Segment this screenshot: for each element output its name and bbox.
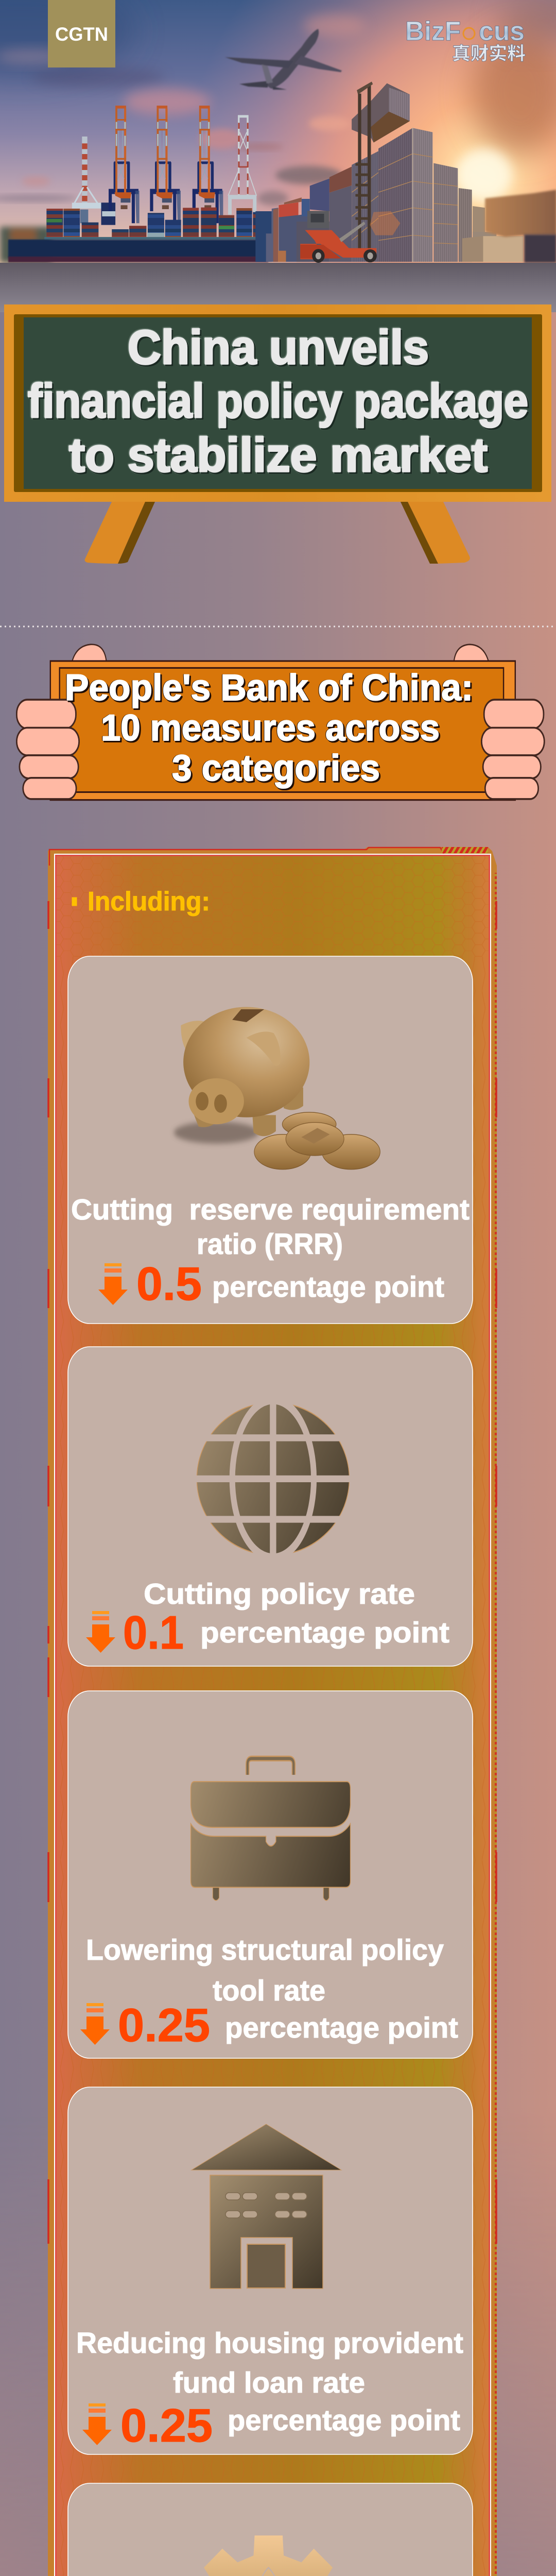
CGTN logo bbox=[48, 0, 115, 67]
card 1 text: Cutting reserve requirement bbox=[71, 1193, 470, 1226]
card 1 text: ratio (RRR) bbox=[197, 1228, 343, 1261]
clouds bbox=[0, 14, 366, 206]
reach stacker bbox=[300, 211, 377, 263]
banner text bbox=[65, 668, 473, 789]
ship hull bbox=[8, 240, 268, 262]
panel inner fill bbox=[48, 854, 497, 2576]
title text bbox=[28, 320, 528, 482]
sky bbox=[0, 0, 556, 268]
card 2 text: Cutting policy rate bbox=[144, 1578, 415, 1611]
banner held by hands bbox=[16, 645, 544, 800]
card 4 text bbox=[76, 2327, 463, 2452]
card 3 text: percentage point bbox=[225, 2011, 458, 2044]
icon: briefcase bbox=[191, 1758, 351, 1901]
CGTN logo: CGTN bbox=[55, 24, 108, 45]
icon: down arrow bbox=[86, 1611, 115, 1653]
banner text: 10 measures across bbox=[101, 708, 440, 749]
BizFocus logo bbox=[405, 16, 526, 64]
icon: piggy bank bbox=[174, 1007, 380, 1170]
card 3 text: tool rate bbox=[213, 1974, 325, 2007]
title text: to stabilize market bbox=[69, 428, 488, 482]
left distant blurred shore bbox=[0, 227, 51, 263]
card 4: housing provident fund bbox=[68, 2087, 473, 2454]
container yard bbox=[255, 81, 556, 263]
signboard bbox=[50, 661, 515, 800]
card 4 text: percentage point bbox=[228, 2404, 460, 2437]
card 3 text: Lowering structural policy bbox=[86, 1934, 444, 1967]
icon: house bbox=[192, 2124, 341, 2289]
title blackboard bbox=[4, 304, 551, 502]
card 3: structural policy tool rate bbox=[68, 1691, 473, 2058]
card 1 text: 0.5 bbox=[136, 1258, 202, 1310]
title text: China unveils bbox=[128, 320, 429, 374]
card 2: policy rate bbox=[68, 1347, 473, 1666]
three gantry cranes bbox=[109, 106, 223, 223]
icon: globe bbox=[192, 1392, 355, 1566]
icon: gear with rocket bbox=[192, 2535, 346, 2576]
card 1 text bbox=[71, 1193, 470, 1310]
blackboard legs bbox=[85, 502, 470, 564]
ship cargo containers bbox=[44, 208, 272, 240]
card 4 text: 0.25 bbox=[120, 2400, 213, 2452]
hero photo: port at sunset bbox=[0, 0, 556, 312]
main panel bbox=[48, 847, 497, 2576]
card 4 text: fund loan rate bbox=[173, 2366, 365, 2399]
card 3 text bbox=[86, 1934, 458, 2052]
card 2 text bbox=[123, 1578, 449, 1659]
icon: down arrow bbox=[98, 1263, 128, 1305]
panel outer frame bbox=[48, 847, 497, 2576]
ground bbox=[0, 263, 556, 312]
thumbs bbox=[72, 645, 489, 662]
icon: down arrow bbox=[82, 2403, 112, 2445]
banner text: People's Bank of China: bbox=[65, 668, 473, 708]
card 2 text: percentage point bbox=[200, 1616, 449, 1649]
BizFocus logo: cus bbox=[479, 16, 525, 46]
card 3 text: 0.25 bbox=[118, 1999, 210, 2052]
banner text: 3 categories bbox=[172, 748, 380, 789]
icon: down arrow bbox=[80, 2003, 110, 2045]
airplane bbox=[225, 29, 342, 90]
card 4 text: Reducing housing provident bbox=[76, 2327, 463, 2360]
card 1 text: percentage point bbox=[212, 1270, 444, 1303]
dotted divider bbox=[0, 625, 556, 628]
card 1: RRR bbox=[68, 956, 473, 1324]
including label: Including: bbox=[88, 887, 210, 917]
left hand bbox=[16, 700, 79, 799]
white and red crane bbox=[228, 115, 256, 215]
BizFocus logo: 真财实料 bbox=[452, 44, 526, 64]
coins bbox=[254, 1112, 380, 1170]
card 5: tech innovation relending bbox=[68, 2483, 473, 2576]
right hand bbox=[481, 700, 544, 799]
far-left striped crane bbox=[73, 137, 115, 225]
card 2 text: 0.1 bbox=[123, 1607, 184, 1659]
BizFocus logo: BizF bbox=[405, 16, 461, 46]
